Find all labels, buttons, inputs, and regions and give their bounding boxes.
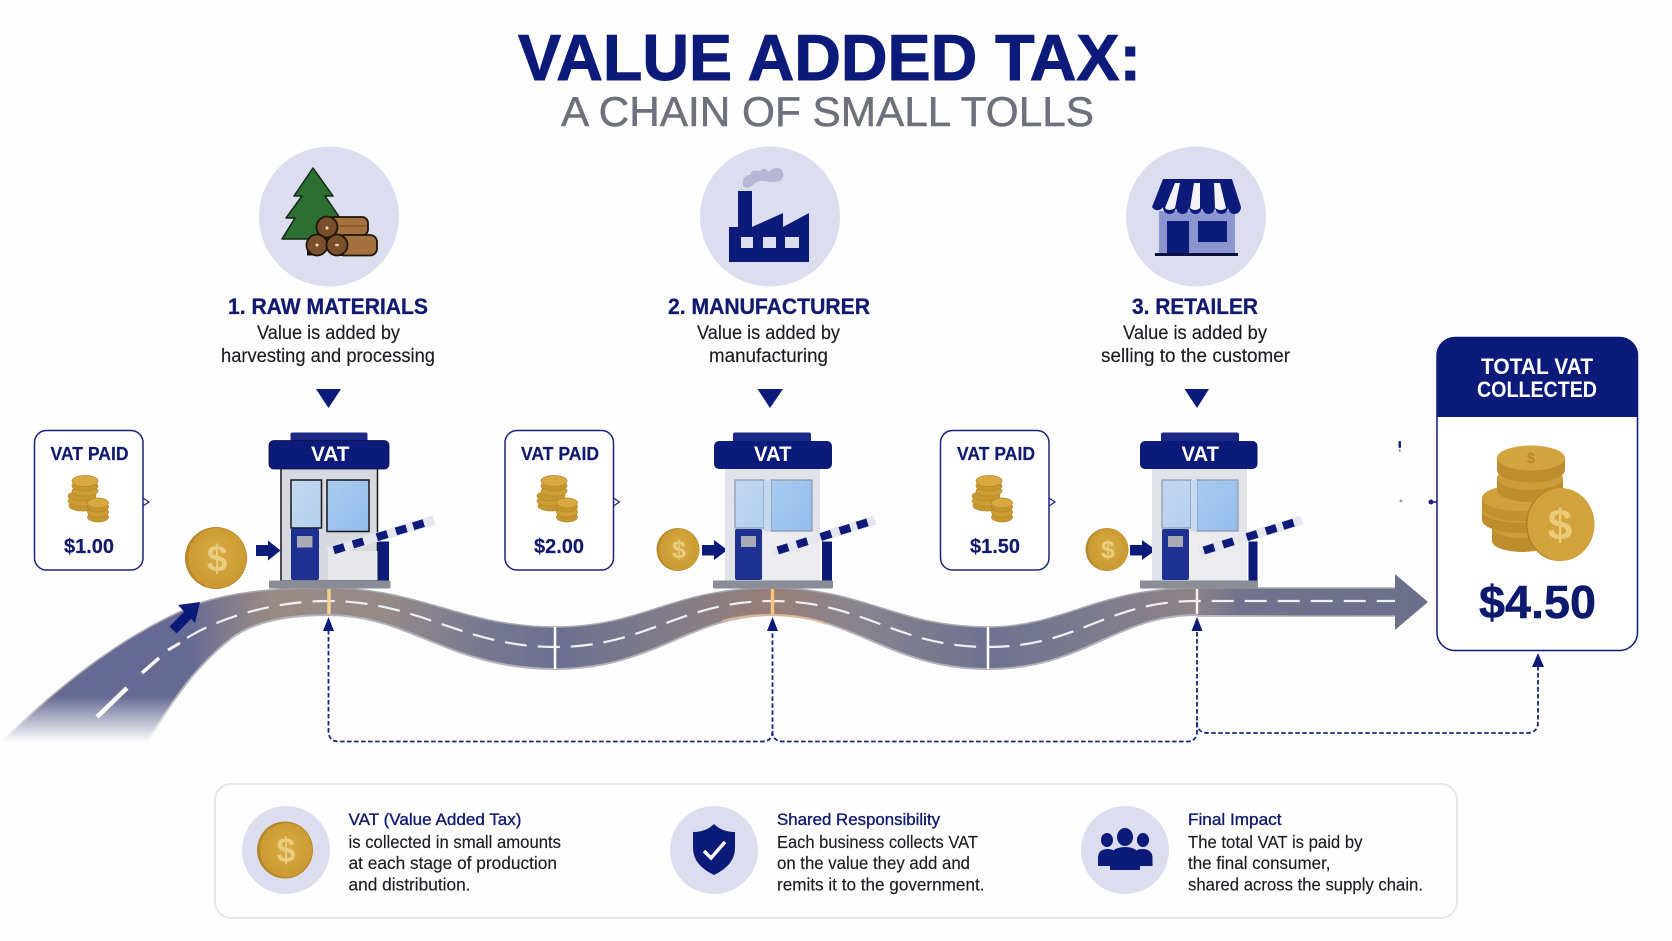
item: shared responsibility: Each business collects VAT <box>777 832 978 852</box>
arrow: step 2 pointer <box>758 389 783 408</box>
subtitle: A CHAIN OF SMALL TOLLS <box>561 88 1094 135</box>
step 3 label: selling to the customer <box>1101 346 1291 367</box>
VAT paid box 2: $2.00 <box>534 536 584 558</box>
VAT paid box 3 <box>940 430 1055 570</box>
item: shared responsibility: on the value they add and <box>777 853 970 873</box>
connector specks <box>1398 441 1437 504</box>
step 2 label: Value is added by <box>697 323 840 344</box>
item: VAT definition <box>242 806 561 894</box>
toll booth 1: VAT <box>311 443 350 466</box>
icon: factory <box>700 146 840 286</box>
total VAT collected panel: TOTAL VAT <box>1481 354 1594 379</box>
VAT paid box 1 <box>34 430 149 570</box>
total VAT collected panel: $ <box>1548 501 1572 550</box>
total VAT collected panel: COLLECTED <box>1477 377 1597 402</box>
item: shared responsibility <box>670 806 984 894</box>
coin 3: $ <box>1101 536 1115 564</box>
arrow: step 3 pointer <box>1184 389 1209 408</box>
arrow: coin into booth 3 <box>1130 540 1156 560</box>
item: final impact: Final Impact <box>1188 810 1282 829</box>
step 3 label: 3. RETAILER <box>1132 294 1258 319</box>
dashed flow lines <box>328 630 1538 742</box>
arrow: road entry <box>173 602 200 630</box>
step 1 label: harvesting and processing <box>221 346 435 367</box>
coin stack: total <box>1482 446 1594 561</box>
icon: raw materials tree and logs <box>259 146 399 286</box>
total VAT collected panel: $ <box>1527 450 1536 467</box>
coin 3 <box>1086 528 1128 571</box>
item: VAT definition: and distribution. <box>348 874 470 894</box>
VAT paid box 2: VAT PAID <box>521 444 599 464</box>
step 2 label: 2. MANUFACTURER <box>668 294 870 319</box>
item: final impact <box>1081 806 1423 894</box>
total VAT collected panel: $4.50 <box>1479 576 1596 628</box>
coin 1 <box>185 527 247 589</box>
toll booth 2: VAT <box>754 443 792 466</box>
coin 2 <box>656 528 700 571</box>
arrow: flow to step 3 <box>1192 617 1202 631</box>
arrow: coin into booth 2 <box>702 540 728 560</box>
road <box>0 574 1428 750</box>
step 2 label <box>668 294 870 367</box>
panel: summary <box>215 784 1457 918</box>
VAT paid box 1: $1.00 <box>64 536 114 558</box>
step 3 label <box>1101 294 1291 367</box>
toll booth 1 <box>269 432 434 588</box>
icon: retail shop <box>1126 146 1266 286</box>
arrow: flow to step 1 <box>323 617 334 631</box>
item: final impact: shared across the supply chain. <box>1188 874 1423 894</box>
item: VAT definition: is collected in small amounts <box>348 832 561 852</box>
step 1 label: Value is added by <box>257 323 400 344</box>
item: final impact: The total VAT is paid by <box>1188 832 1363 852</box>
item: VAT definition: at each stage of production <box>348 853 557 873</box>
VAT paid box 2 <box>505 430 620 570</box>
item: VAT definition: VAT (Value Added Tax) <box>348 810 522 829</box>
VAT paid box 3: $1.50 <box>970 536 1020 558</box>
toll booth 3 <box>1140 432 1302 588</box>
coin 2: $ <box>672 536 686 564</box>
step 1 label: 1. RAW MATERIALS <box>228 294 428 319</box>
item: VAT definition: $ <box>277 832 296 870</box>
VAT paid box 3: VAT PAID <box>957 444 1035 464</box>
toll booth 2 <box>713 432 875 588</box>
coin 1: $ <box>207 538 228 579</box>
step 1 label <box>221 294 435 367</box>
item: final impact: the final consumer, <box>1188 853 1330 873</box>
arrow: step 1 pointer <box>316 389 341 408</box>
item: shared responsibility: remits it to the government. <box>777 874 984 894</box>
total VAT collected panel <box>1437 338 1638 650</box>
arrow: flow to total <box>1532 653 1544 667</box>
toll booth 3: VAT <box>1182 443 1219 466</box>
title: VALUE ADDED TAX: <box>518 21 1141 94</box>
step 3 label: Value is added by <box>1123 323 1267 344</box>
arrow: coin into booth 1 <box>256 540 280 560</box>
step 2 label: manufacturing <box>709 346 828 367</box>
item: shared responsibility: Shared Responsibility <box>777 810 940 829</box>
VAT paid box 1: VAT PAID <box>50 444 128 464</box>
arrow: flow to step 2 <box>767 617 778 631</box>
